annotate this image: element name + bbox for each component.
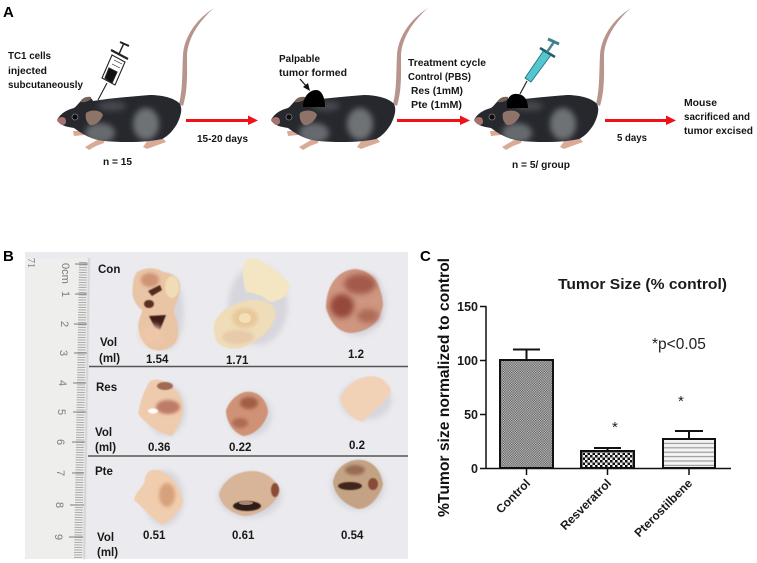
arrow: 5 days (605, 116, 676, 125)
labels: control row: (ml) (99, 353, 120, 365)
ruler: 1 (59, 291, 71, 297)
labels: pterostilbene row: Vol (97, 532, 114, 544)
mouse 2 (271, 8, 428, 150)
panel: tumor photo (25, 252, 408, 559)
ruler: 71 (25, 258, 36, 268)
asterisk: resveratrol: * (612, 419, 618, 436)
labels: resveratrol row: 0.22 (229, 442, 251, 454)
text: n = 5/ group: n = 5/ group (512, 159, 570, 171)
text: injection note: TC1 cells (8, 50, 51, 62)
text: endpoint: sacrificed and (684, 111, 750, 123)
tumors: control row (132, 258, 386, 350)
labels: control row: 1.54 (146, 354, 169, 366)
labels: control row (98, 264, 364, 367)
labels: pterostilbene row: (ml) (97, 547, 118, 559)
labels: control row: Vol (100, 337, 117, 349)
labels: pterostilbene row: 0.61 (232, 530, 255, 542)
text: endpoint: Mouse (684, 97, 717, 109)
labels: resveratrol row: Res (96, 382, 117, 394)
ruler: 4 (56, 380, 68, 386)
bar: pterostilbene (663, 431, 715, 468)
ruler (25, 258, 89, 559)
ruler: 8 (53, 502, 65, 508)
text: endpoint: tumor excised (684, 125, 753, 137)
icon: blue syringe (520, 39, 559, 94)
panel label B: B (3, 248, 14, 265)
text: treatment cycle: Treatment cycle (408, 57, 486, 69)
text: injection note: subcutaneously (8, 79, 83, 91)
labels: control row: 1.71 (226, 355, 249, 367)
x axis labels: Resveratrol (558, 476, 614, 533)
chart title: Tumor Size (% control) (558, 276, 727, 293)
bar: resveratrol (581, 448, 634, 468)
ruler: 9 (52, 534, 64, 540)
icon: black syringe (98, 42, 129, 100)
arrow: 15-20 days (186, 116, 258, 125)
text: treatment cycle: Res (1mM) (411, 85, 463, 97)
y axis values: 100 (457, 354, 478, 368)
ruler: 0cm (59, 263, 71, 284)
labels: control row: Con (98, 264, 120, 276)
axes (480, 306, 731, 475)
y axis values: 50 (464, 408, 478, 422)
arrow: treatment (397, 116, 470, 125)
text: palpable tumor: Palpable (279, 53, 320, 65)
ruler: 7 (54, 470, 66, 476)
significance note: *p<0.05 (652, 336, 706, 353)
text: 15-20 days: 15-20 days (197, 133, 248, 145)
labels: resveratrol row: Vol (95, 427, 112, 439)
panel: experimental timeline (3, 4, 753, 171)
mouse 1 (57, 8, 214, 150)
y axis values: 0 (471, 462, 478, 476)
labels: resveratrol row: 0.36 (148, 442, 170, 454)
x axis labels: Pterostilbene (631, 476, 695, 540)
labels: pterostilbene row: 0.51 (143, 530, 166, 542)
text: injection note: injected (8, 65, 47, 77)
ruler: 6 (54, 439, 66, 445)
labels: resveratrol row: 0.2 (349, 440, 365, 452)
text: endpoint (684, 97, 753, 137)
asterisk: pterostilbene: * (678, 393, 684, 410)
divider lines (88, 366, 408, 456)
labels: control row: 1.2 (348, 349, 364, 361)
ruler: 3 (57, 350, 69, 356)
y axis values: 150 (457, 300, 478, 314)
text: injection note (8, 50, 83, 91)
panel label C: C (420, 248, 431, 265)
labels: resveratrol row: (ml) (95, 442, 116, 454)
x axis labels (493, 476, 695, 540)
y axis values (457, 300, 478, 476)
ruler: 2 (58, 321, 70, 327)
text: treatment cycle: Control (PBS) (408, 71, 471, 83)
text: n = 15: n = 15 (103, 156, 132, 168)
labels: resveratrol row (95, 382, 365, 454)
labels: pterostilbene row: 0.54 (341, 530, 364, 542)
panel: bar chart (436, 258, 731, 540)
tumor mound 2 (303, 90, 325, 107)
text: treatment cycle: Pte (1mM) (411, 99, 462, 111)
text: 5 days: 5 days (617, 132, 647, 144)
x axis labels: Control (493, 476, 533, 516)
text: palpable tumor: tumor formed (279, 67, 347, 79)
ruler: 5 (55, 409, 67, 415)
tumors: resveratrol row (138, 376, 392, 437)
tumors: pterostilbene row (134, 460, 385, 526)
photo background (25, 252, 408, 559)
labels: pterostilbene row: Pte (95, 466, 113, 478)
tumor mound 3 (507, 94, 528, 108)
labels: pterostilbene row (95, 466, 364, 559)
bar: control (500, 350, 553, 468)
y axis title: %Tumor size normalized to control (436, 258, 453, 517)
mouse 3 (474, 8, 631, 150)
text: palpable tumor (279, 53, 347, 79)
arrow: to tumor (300, 79, 310, 91)
text: treatment cycle (408, 57, 486, 111)
panel label A: A (3, 4, 14, 21)
